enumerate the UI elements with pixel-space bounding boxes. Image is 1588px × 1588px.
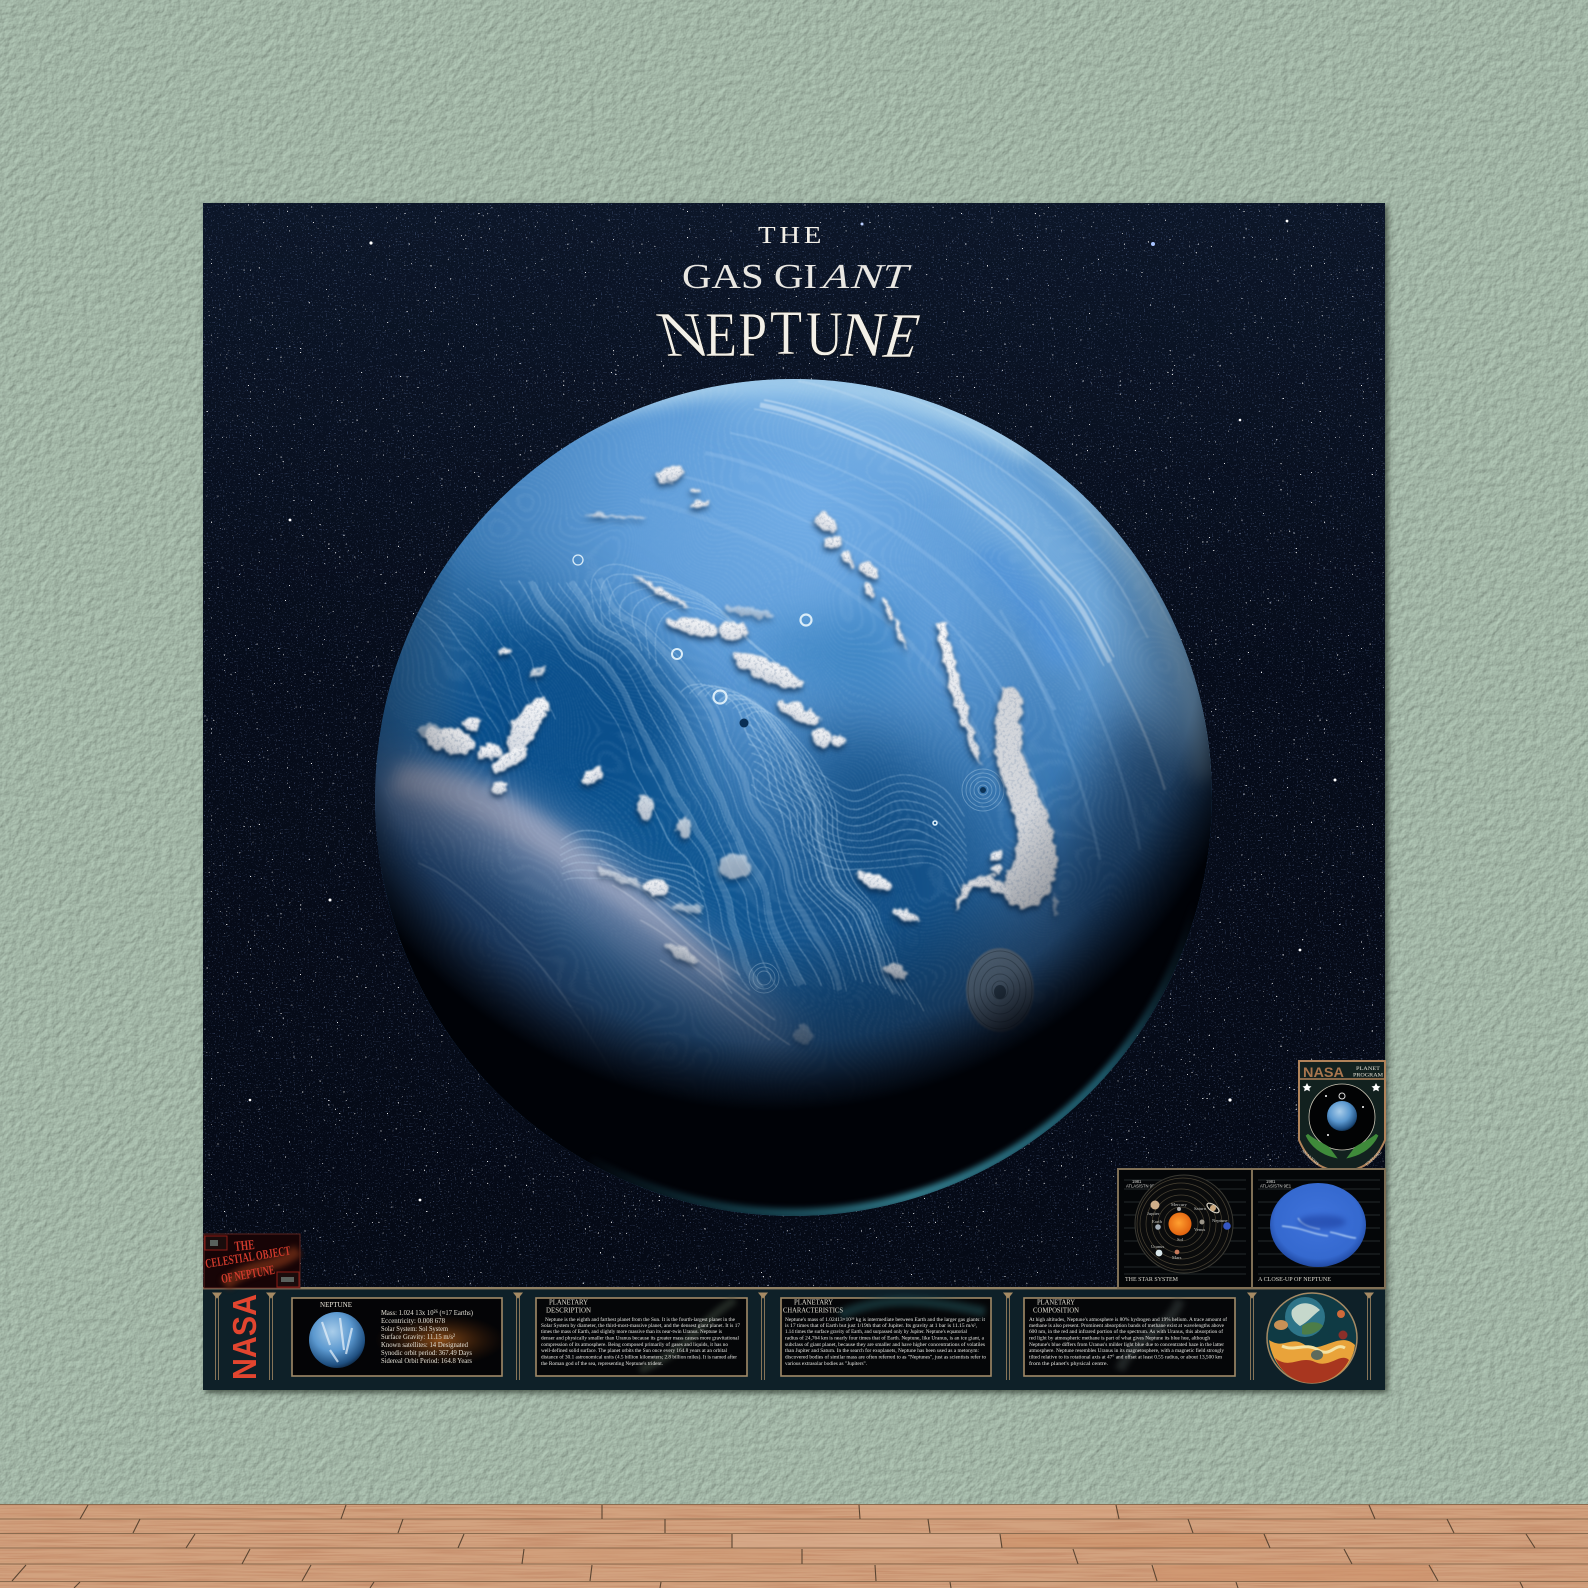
heading: COMPOSITION: [1033, 1306, 1080, 1314]
solar system diagram: [1135, 1175, 1233, 1273]
fact list: Sidereal Orbit Period: 164.8 Years: [381, 1356, 472, 1365]
fact list: Solar System: Sol System: [381, 1324, 448, 1333]
badge program text: PROGRAM: [1353, 1074, 1384, 1078]
circular emblem: [1267, 1293, 1357, 1383]
title line: GAS GIANT: ANT: [816, 257, 915, 296]
label text: OF NEPTUNE: [220, 1262, 276, 1286]
panel heading: NEPTUNE: [320, 1300, 352, 1309]
panel: planetary description: [536, 1298, 747, 1376]
body text: various extrasolar bodies as "Jupiters".: [785, 1361, 868, 1367]
planet labels: Mars: [1172, 1255, 1182, 1260]
planet labels: Venus: [1194, 1227, 1205, 1232]
terminator shadow: [375, 500, 1212, 1216]
body text: than Jupiter and Saturn. In the search for exoplanets, Neptune has been used as a metonym:: [785, 1347, 979, 1354]
wooden floor: [0, 1504, 1588, 1588]
title line: THE: THE: [758, 223, 825, 249]
body text: from the planet's physical centre.: [1029, 1360, 1109, 1367]
body text: [1029, 1316, 1227, 1367]
swath fine lines: [600, 860, 790, 1045]
body text: discovered bodies of similar mass are often referred to as "Neptunes", just as scientists refer to: [785, 1354, 986, 1360]
planet labels: [1147, 1202, 1228, 1260]
planet base sphere: [375, 379, 1212, 1216]
caption: THE STAR SYSTEM: [1125, 1276, 1178, 1283]
planet Neptune: [375, 371, 1213, 1217]
title line: NEPTUNE: T: [770, 297, 802, 368]
body text: denser and physically smaller than Uranus because its greater mass causes more gravitational: [541, 1336, 739, 1342]
flowing swirl lines: [416, 563, 965, 1009]
body text: is 17 times that of Earth but just 1/19th that of Jupiter. Its gravity at 1 bar is 11.15 m/s²,: [785, 1322, 978, 1329]
body text: well-defined solid surface. The planet orbits the Sun once every 164.8 years at an orbital: [541, 1347, 727, 1354]
upper right pale bands: [640, 371, 1172, 860]
body text: atmosphere. Neptune resembles Uranus in its magnetosphere, with a magnetic field strongly: [1029, 1347, 1224, 1354]
fact list: Eccentricity: 0.008 678: [381, 1316, 445, 1325]
title line: GAS GIANT: GAS GI: [682, 257, 817, 296]
badge program text: PLANET: [1356, 1067, 1380, 1072]
body text: Solar System by diameter, the third-most-massive planet, and the densest giant planet. It is 17: [541, 1323, 740, 1329]
fact list: Known satellites: 14 Designated: [381, 1340, 468, 1349]
panel: close-up of Neptune: [1252, 1169, 1385, 1288]
atmospheric colour zones: [375, 382, 1207, 1110]
storm vortex: [966, 948, 1034, 1032]
body text: tilted relative to its rotational axis at 47° and offset at least 0.55 radius, or about 13,500 km: [1029, 1354, 1223, 1360]
label text: [204, 1238, 292, 1286]
body text: times the mass of Earth, and slightly more massive than its near-twin Uranus. Neptune is: [541, 1328, 722, 1335]
body text: the Roman god of the sea, representing Neptune's trident.: [541, 1360, 664, 1367]
heading: PLANETARY: [1037, 1298, 1076, 1306]
body text: Neptune is the eighth and farthest planet from the Sun. It is the fourth-largest planet in the: [545, 1316, 735, 1323]
fact list: Mass: 1.024 13x 10²⁶ (≈17 Earths): [381, 1308, 473, 1317]
concentric vortices: [573, 555, 1004, 993]
body text: Neptune's mass of 1.02413×10²⁶ kg is intermediate between Earth and the larger gas giants: it: [785, 1316, 985, 1323]
title: [650, 223, 929, 372]
panel: star system: [1118, 1169, 1252, 1288]
title line: GAS GIANT: [682, 257, 915, 296]
panel: Neptune facts: [292, 1298, 505, 1376]
badge emblem: [1300, 1083, 1383, 1167]
title line: NEPTUNE: [650, 297, 929, 372]
teal limb rim: [590, 840, 1208, 1214]
caption small: 1981: [1266, 1179, 1276, 1184]
title line: NEPTUNE: N: [650, 300, 716, 371]
caption small: 1981: [1132, 1179, 1142, 1184]
NASA logo: NASA: [226, 1294, 263, 1380]
label text: THE: [234, 1238, 255, 1255]
badge emblem: ANALYSIS: [1300, 1148, 1320, 1167]
body text: red light by atmospheric methane is part of what gives Neptune its blue hue, although: [1029, 1334, 1210, 1342]
title line: NEPTUNE: P: [738, 299, 767, 370]
planet labels: Earth: [1152, 1219, 1163, 1224]
fact list: [381, 1308, 473, 1365]
Neptune close-up image: [1270, 1183, 1366, 1267]
planet labels: Saturn: [1194, 1206, 1207, 1211]
title line: NEPTUNE: E: [705, 299, 737, 370]
body text: 600 nm, in the red and infrared portion of the spectrum. As with Uranus, this absorption of: [1029, 1328, 1223, 1335]
celestial object label: [204, 1234, 300, 1288]
body text: [785, 1316, 986, 1367]
badge emblem: EXPLORE: [1364, 1149, 1383, 1167]
decorative pillars: [213, 1293, 1373, 1380]
planet labels: Uranus: [1151, 1244, 1164, 1249]
title line: NEPTUNE: E: [876, 301, 929, 372]
heading: PLANETARY: [794, 1298, 834, 1306]
body text: methane is also present. Prominent absorption bands of methane exist at wavelengths above: [1029, 1322, 1224, 1329]
bottom information band: [203, 1287, 1385, 1390]
lower left limb arcs: [418, 862, 576, 1014]
body text: 1.14 times the surface gravity of Earth, and surpassed only by Jupiter. Neptune's equatorial: [785, 1328, 967, 1335]
poster: [203, 203, 1385, 1390]
body text: subclass of giant planet, because they are smaller and have higher concentrations of volatiles: [785, 1341, 985, 1348]
planet labels: Neptune: [1212, 1218, 1228, 1223]
caption: A CLOSE-UP OF NEPTUNE: [1258, 1276, 1331, 1283]
mission badge: [1299, 1061, 1385, 1171]
fact list: Surface Gravity: 11.15 m/s²: [381, 1332, 456, 1341]
title line: NEPTUNE: U: [806, 298, 843, 369]
fine flow line texture: [408, 446, 1104, 1008]
body text: distance of 30.1 astronomical units (4.5 billion kilometers; 2.8 billion miles). It is named after: [541, 1354, 737, 1360]
planet labels: Jupiter: [1147, 1211, 1160, 1216]
caption small: ATLAS/STN 9E1: [1260, 1184, 1292, 1188]
mini planet: [309, 1312, 365, 1368]
heading: PLANETARY: [549, 1298, 589, 1306]
body text: [541, 1316, 740, 1367]
planet labels: Sol: [1177, 1237, 1184, 1242]
body text: radius of 24,764 km is nearly four times that of Earth. Neptune, like Uranus, is an ice giant, a: [785, 1334, 984, 1342]
caption small: ATLAS/STN 9E1: [1126, 1184, 1158, 1188]
panel: planetary composition: [1024, 1298, 1235, 1376]
body text: compression of its atmosphere. Being composed primarily of gases and liquids, it has no: [541, 1341, 728, 1348]
planet labels: Mercury: [1171, 1202, 1188, 1207]
heading: DESCRIPTION: [546, 1306, 592, 1314]
heading: CHARACTERISTICS: [783, 1306, 843, 1314]
label text: CELESTIAL OBJECT: [204, 1243, 292, 1271]
title line: NEPTUNE: N: [835, 299, 892, 370]
body text: At high altitudes, Neptune's atmosphere is 80% hydrogen and 19% helium. A trace amount of: [1029, 1316, 1227, 1323]
badge NASA wordmark: NASA: [1303, 1064, 1344, 1080]
star field: [203, 203, 1385, 1288]
grey cloud swath lower left: [378, 765, 815, 1060]
fact list: Synodic orbit period: 367.49 Days: [381, 1348, 472, 1357]
panel: planetary characteristics: [781, 1298, 991, 1376]
body text: Neptune's blue differs from Uranus's milder light blue due to concentrated haze in the latter: [1029, 1341, 1224, 1348]
white clouds: [418, 462, 1058, 1044]
